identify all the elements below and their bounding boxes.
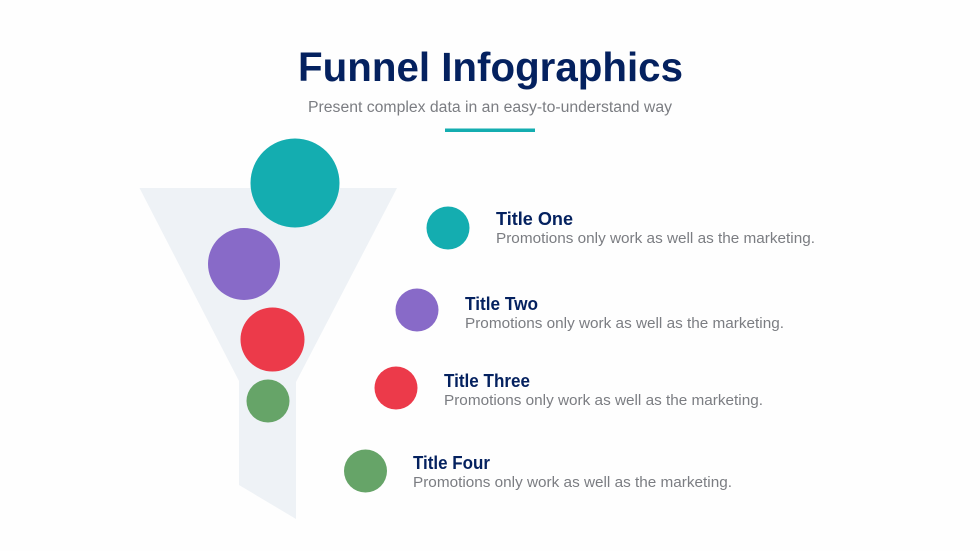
item one description: Promotions only work as well as the marketing. (496, 231, 815, 247)
item three dot (374, 366, 418, 410)
item two heading: Title Two (465, 294, 538, 314)
item two (396, 288, 784, 332)
funnel diagram (140, 138, 397, 519)
item three (374, 366, 763, 410)
item four dot (344, 450, 387, 492)
subtitle: Present complex data in an easy-to-understand way (308, 99, 672, 116)
item four heading: Title Four (413, 453, 490, 473)
item two dot (396, 288, 438, 332)
item one heading: Title One (496, 209, 573, 229)
item three heading: Title Three (444, 371, 530, 391)
title underline (445, 128, 535, 132)
funnel shape (140, 188, 397, 519)
funnel ball: teal (250, 138, 340, 228)
title: Funnel Infographics (298, 44, 683, 90)
item one (426, 206, 815, 250)
item four (344, 450, 732, 492)
item one dot (426, 206, 470, 250)
funnel ball: red (240, 308, 304, 372)
funnel ball: green (246, 380, 290, 422)
item three description: Promotions only work as well as the marketing. (444, 393, 763, 409)
item two description: Promotions only work as well as the marketing. (465, 316, 784, 332)
funnel ball: purple (208, 228, 280, 300)
item four description: Promotions only work as well as the marketing. (413, 475, 732, 491)
